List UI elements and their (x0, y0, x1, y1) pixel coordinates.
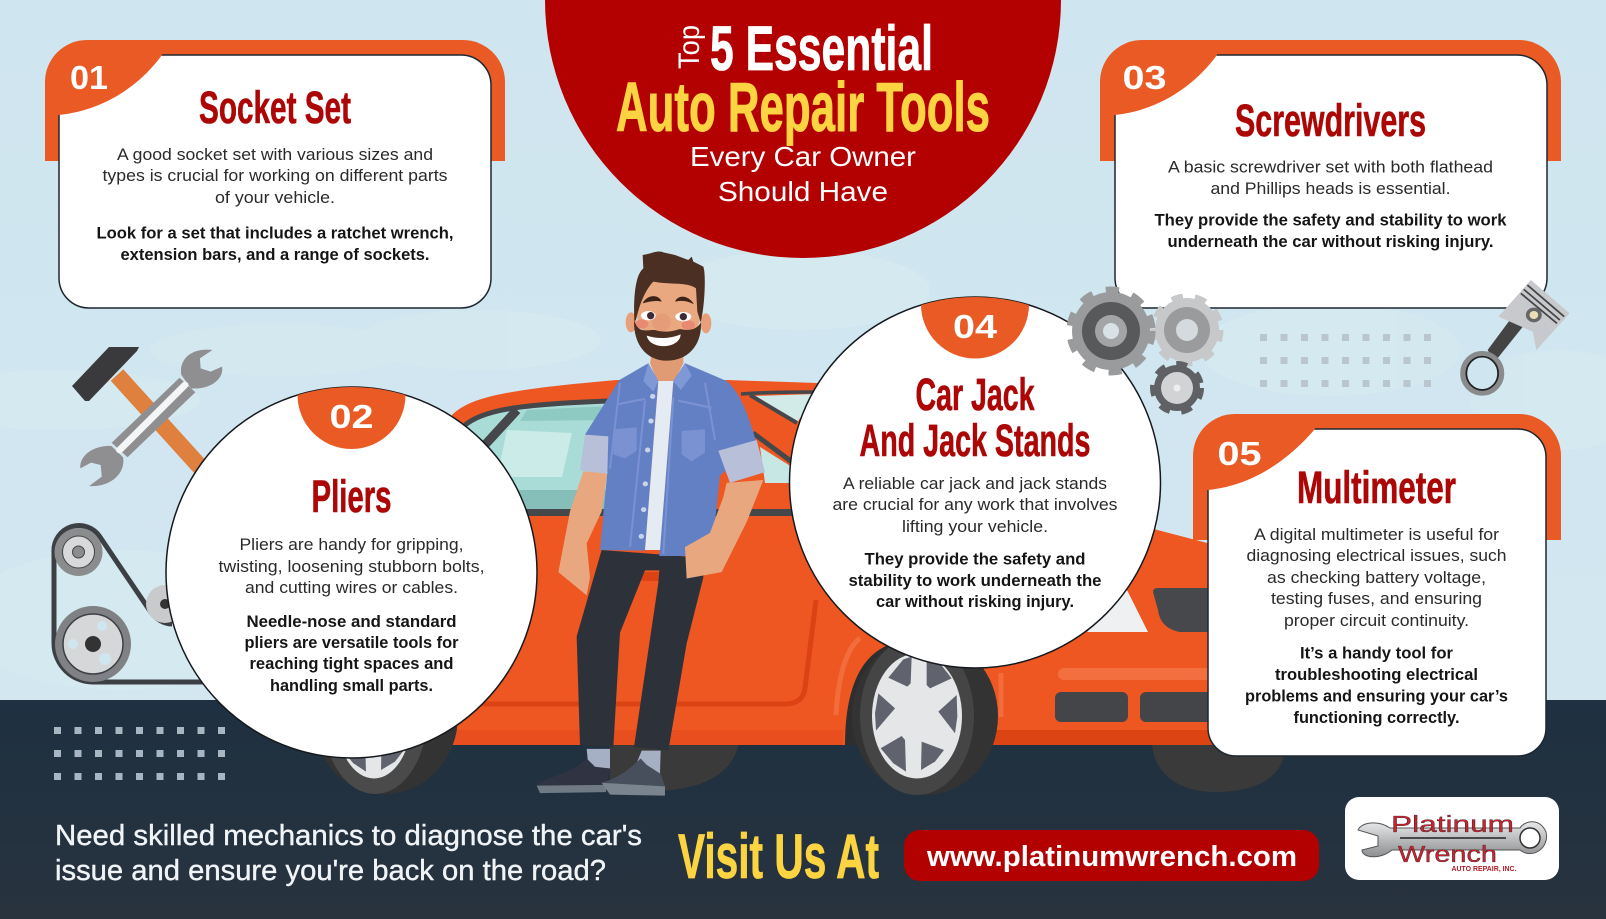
call to action text (55, 820, 642, 887)
cheeks (635, 319, 648, 329)
heading: Pliers (312, 471, 392, 522)
lower body band (438, 730, 843, 745)
panel: 05 multimeter (1193, 414, 1561, 756)
heading: Socket Set (199, 82, 351, 133)
hair (634, 252, 705, 322)
windshield and pillar (741, 392, 817, 483)
body text: lifting your vehicle. (902, 517, 1048, 536)
socks (587, 749, 661, 774)
trousers (577, 550, 703, 751)
right wheel (852, 637, 998, 795)
collar (643, 363, 692, 392)
subtitle (690, 141, 916, 207)
beard (634, 320, 701, 361)
body text: underneath the car without risking injury. (1168, 232, 1494, 251)
body text (832, 474, 1118, 611)
subtitle: Every Car Owner (690, 141, 916, 172)
face (636, 263, 702, 347)
smile (647, 334, 681, 346)
body text: diagnosing electrical issues, such (1246, 546, 1506, 565)
icon: hammer and wrench (72, 347, 222, 486)
icon: wrench (1358, 822, 1547, 857)
body text: A basic screwdriver set with both flathead (1168, 158, 1493, 176)
heading: Screwdrivers (1235, 95, 1426, 146)
body text: A good socket set with various sizes and (117, 145, 433, 164)
panel: 03 screwdrivers (1100, 40, 1561, 308)
title circle (545, 0, 1061, 258)
body text: are crucial for any work that involves (832, 495, 1118, 514)
body text: troubleshooting electrical (1275, 665, 1478, 684)
visit us heading: Visit Us At (678, 822, 879, 892)
url button: www.platinumwrench.com (926, 841, 1297, 873)
title: 5 Essential: 5 Essential (710, 14, 933, 84)
panel: 01 socket set (45, 40, 505, 308)
panel: 03 screwdrivers: 03 (1122, 59, 1166, 96)
left wheel (312, 638, 458, 794)
heading (860, 369, 1090, 466)
logo: Platinum Wrench: AUTO REPAIR, INC. (1452, 866, 1517, 873)
body text: functioning correctly. (1294, 708, 1460, 727)
body text (96, 145, 454, 264)
body text: twisting, loosening stubborn bolts, (218, 557, 484, 576)
side window (450, 401, 810, 516)
panel: 04 car jack: 04 (953, 308, 998, 345)
title: Top: Top (673, 25, 706, 69)
heading: Car Jack (916, 369, 1035, 420)
sleeve cuffs (580, 435, 765, 483)
body text: testing fuses, and ensuring (1271, 589, 1482, 608)
icon: piston (1463, 280, 1570, 393)
icon: gears (1072, 292, 1219, 411)
body (537, 354, 765, 796)
t-shirt (645, 381, 673, 550)
ground band (0, 700, 1606, 919)
door seam (430, 600, 816, 704)
rear lamp and grille (1087, 590, 1148, 632)
number tab (298, 387, 406, 449)
dot grid on ground (54, 727, 225, 780)
car (312, 380, 1285, 795)
shirt seams (610, 383, 715, 554)
body text (1245, 525, 1508, 727)
body text (1154, 158, 1507, 251)
body text: problems and ensuring your car’s (1245, 686, 1508, 706)
subtitle: Should Have (718, 176, 888, 207)
body text: types is crucial for working on different parts (102, 166, 448, 185)
rear wheel shadow (1152, 745, 1285, 792)
eyes (641, 311, 656, 320)
heading: Multimeter (1297, 462, 1456, 513)
body text: It’s a handy tool for (1300, 644, 1453, 662)
body text: Look for a set that includes a ratchet wrench, (96, 224, 454, 242)
right arm and hand (685, 480, 763, 579)
neck (650, 354, 683, 383)
body text: car without risking injury. (876, 592, 1074, 611)
pockets (613, 427, 705, 461)
body text: stability to work underneath the (848, 571, 1102, 590)
wheel arch (845, 640, 990, 745)
call to action text: issue and ensure you're back on the road? (55, 855, 606, 887)
ears (626, 312, 636, 332)
body text: of your vehicle. (215, 188, 335, 207)
left arm (558, 471, 607, 595)
panel: 01 socket set: 01 (70, 59, 108, 96)
car shadow under person (610, 740, 739, 791)
left shoe (537, 759, 610, 788)
logo: Platinum Wrench (1345, 797, 1559, 880)
title: Auto Repair Tools: Auto Repair Tools (616, 68, 990, 146)
body text: A reliable car jack and jack stands (843, 474, 1107, 493)
call to action text: Need skilled mechanics to diagnose the car's (55, 820, 642, 852)
body text: A digital multimeter is useful for (1254, 525, 1499, 544)
body text: Pliers are handy for gripping, (240, 535, 464, 554)
nose (652, 314, 671, 331)
panel: 05 multimeter: 05 (1218, 435, 1262, 472)
head (626, 252, 711, 361)
panel: 02 pliers (165, 386, 538, 759)
buttons (639, 394, 655, 539)
sky background (0, 0, 1606, 705)
mechanic character (537, 252, 765, 796)
body text: reaching tight spaces and (250, 654, 454, 673)
panel: 04 car jack (788, 296, 1162, 669)
door handle (640, 572, 690, 581)
heading: And Jack Stands (860, 415, 1090, 466)
body text: pliers are versatile tools for (244, 633, 459, 652)
body text: and cutting wires or cables. (245, 578, 458, 597)
logo: Platinum Wrench: Wrench (1398, 841, 1497, 867)
body text: as checking battery voltage, (1267, 568, 1486, 587)
dot grid on sky (1260, 334, 1431, 387)
number tab (921, 297, 1029, 358)
shirt (585, 363, 658, 551)
body text: handling small parts. (270, 676, 433, 695)
url button (904, 830, 1319, 881)
eyebrows (643, 296, 694, 304)
body text: extension bars, and a range of sockets. (120, 245, 430, 264)
body text: proper circuit continuity. (1284, 611, 1469, 630)
body text: and Phillips heads is essential. (1210, 179, 1450, 198)
panel: 02 pliers: 02 (330, 398, 374, 435)
logo: Platinum Wrench: Platinum (1391, 811, 1514, 837)
icon: serpentine belt and pulleys (54, 525, 230, 682)
body text: They provide the safety and (864, 550, 1086, 568)
right shoe (602, 759, 665, 786)
body text: They provide the safety and stability to work (1154, 210, 1507, 230)
body text (218, 535, 484, 695)
body text: Needle-nose and standard (246, 612, 456, 631)
car body (438, 380, 1215, 745)
